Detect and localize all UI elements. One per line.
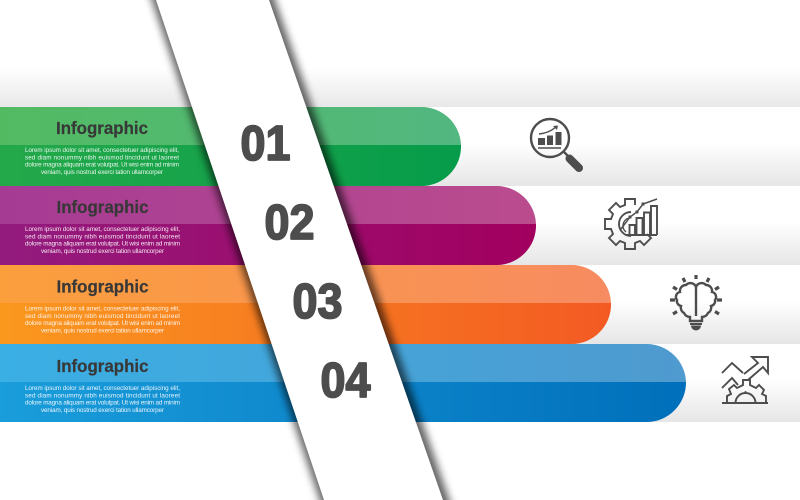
body text 2: veniam, quis nostrud exerci tation ullamcorper — [41, 248, 164, 255]
text block 2 — [25, 197, 180, 255]
panel: blue bar — [0, 344, 686, 422]
body text 2 — [25, 226, 180, 255]
number 01: 01 — [240, 117, 290, 171]
body text 1: Lorem ipsum dolor sit amet, consectetuer adipiscing elit, — [25, 147, 179, 154]
text block 4 — [25, 356, 180, 414]
body text 3: veniam, quis nostrud exerci tation ullamcorper — [41, 327, 164, 334]
heading 1: Infographic — [56, 118, 148, 138]
icon: magnifier with chart — [531, 119, 579, 168]
body text 3 — [25, 306, 180, 334]
top grey fade background — [0, 68, 800, 107]
body text 1: veniam, quis nostrud exerci tation ullamcorper — [41, 169, 163, 176]
body text 4: veniam, quis nostrud exerci tation ullamcorper — [41, 407, 164, 414]
body text 2: Lorem ipsum dolor sit amet, consectetuer adipiscing elit, — [25, 226, 180, 233]
body text 4: sed diam nonummy nibh euismod tincidunt ut laoreet — [25, 392, 180, 399]
body text 3: dolore magna aliquam erat volutpat. Ut wisi enim ad minim — [25, 320, 180, 327]
heading 2: Infographic — [56, 197, 149, 217]
text block 1 — [25, 118, 179, 176]
row background 2 — [0, 186, 800, 265]
row background 4 — [0, 344, 800, 422]
body text 1: sed diam nonummy nibh euismod tincidunt ut laoreet — [25, 154, 179, 161]
text block 3 — [25, 276, 180, 334]
row background 1 — [0, 107, 800, 186]
icon: brain light bulb — [670, 275, 722, 330]
heading 3: Infographic — [56, 276, 149, 296]
panel: orange bar — [0, 265, 611, 344]
row background 3 — [0, 265, 800, 344]
panel: purple bar — [0, 186, 536, 265]
body text 4: dolore magna aliquam erat volutpat. Ut wisi enim ad minim — [25, 400, 180, 407]
number 03: 03 — [292, 275, 342, 329]
number 02: 02 — [264, 196, 314, 250]
number 04: 04 — [320, 354, 370, 408]
diagonal white band — [156, 0, 443, 500]
body text 2: sed diam nonummy nibh euismod tincidunt ut laoreet — [25, 233, 180, 240]
icon: gear with rising arrow — [722, 357, 768, 403]
body text 2: dolore magna aliquam erat volutpat. Ut wisi enim ad minim — [25, 241, 180, 248]
panel: green bar — [0, 107, 461, 186]
heading 4: Infographic — [56, 356, 149, 376]
body text 3: Lorem ipsum dolor sit amet, consectetuer adipiscing elit, — [25, 306, 180, 312]
body text 3: sed diam nonummy nibh euismod tincidunt ut laoreet — [25, 313, 180, 320]
body text 1 — [25, 147, 179, 176]
diagonal band shadow — [145, 0, 453, 500]
body text 4: Lorem ipsum dolor sit amet, consectetuer adipiscing elit, — [25, 385, 180, 392]
icon: gear with bar chart — [605, 199, 657, 249]
body text 4 — [25, 385, 180, 414]
body text 1: dolore magna aliquam erat volutpat. Ut wisi enim ad minim — [25, 162, 179, 169]
